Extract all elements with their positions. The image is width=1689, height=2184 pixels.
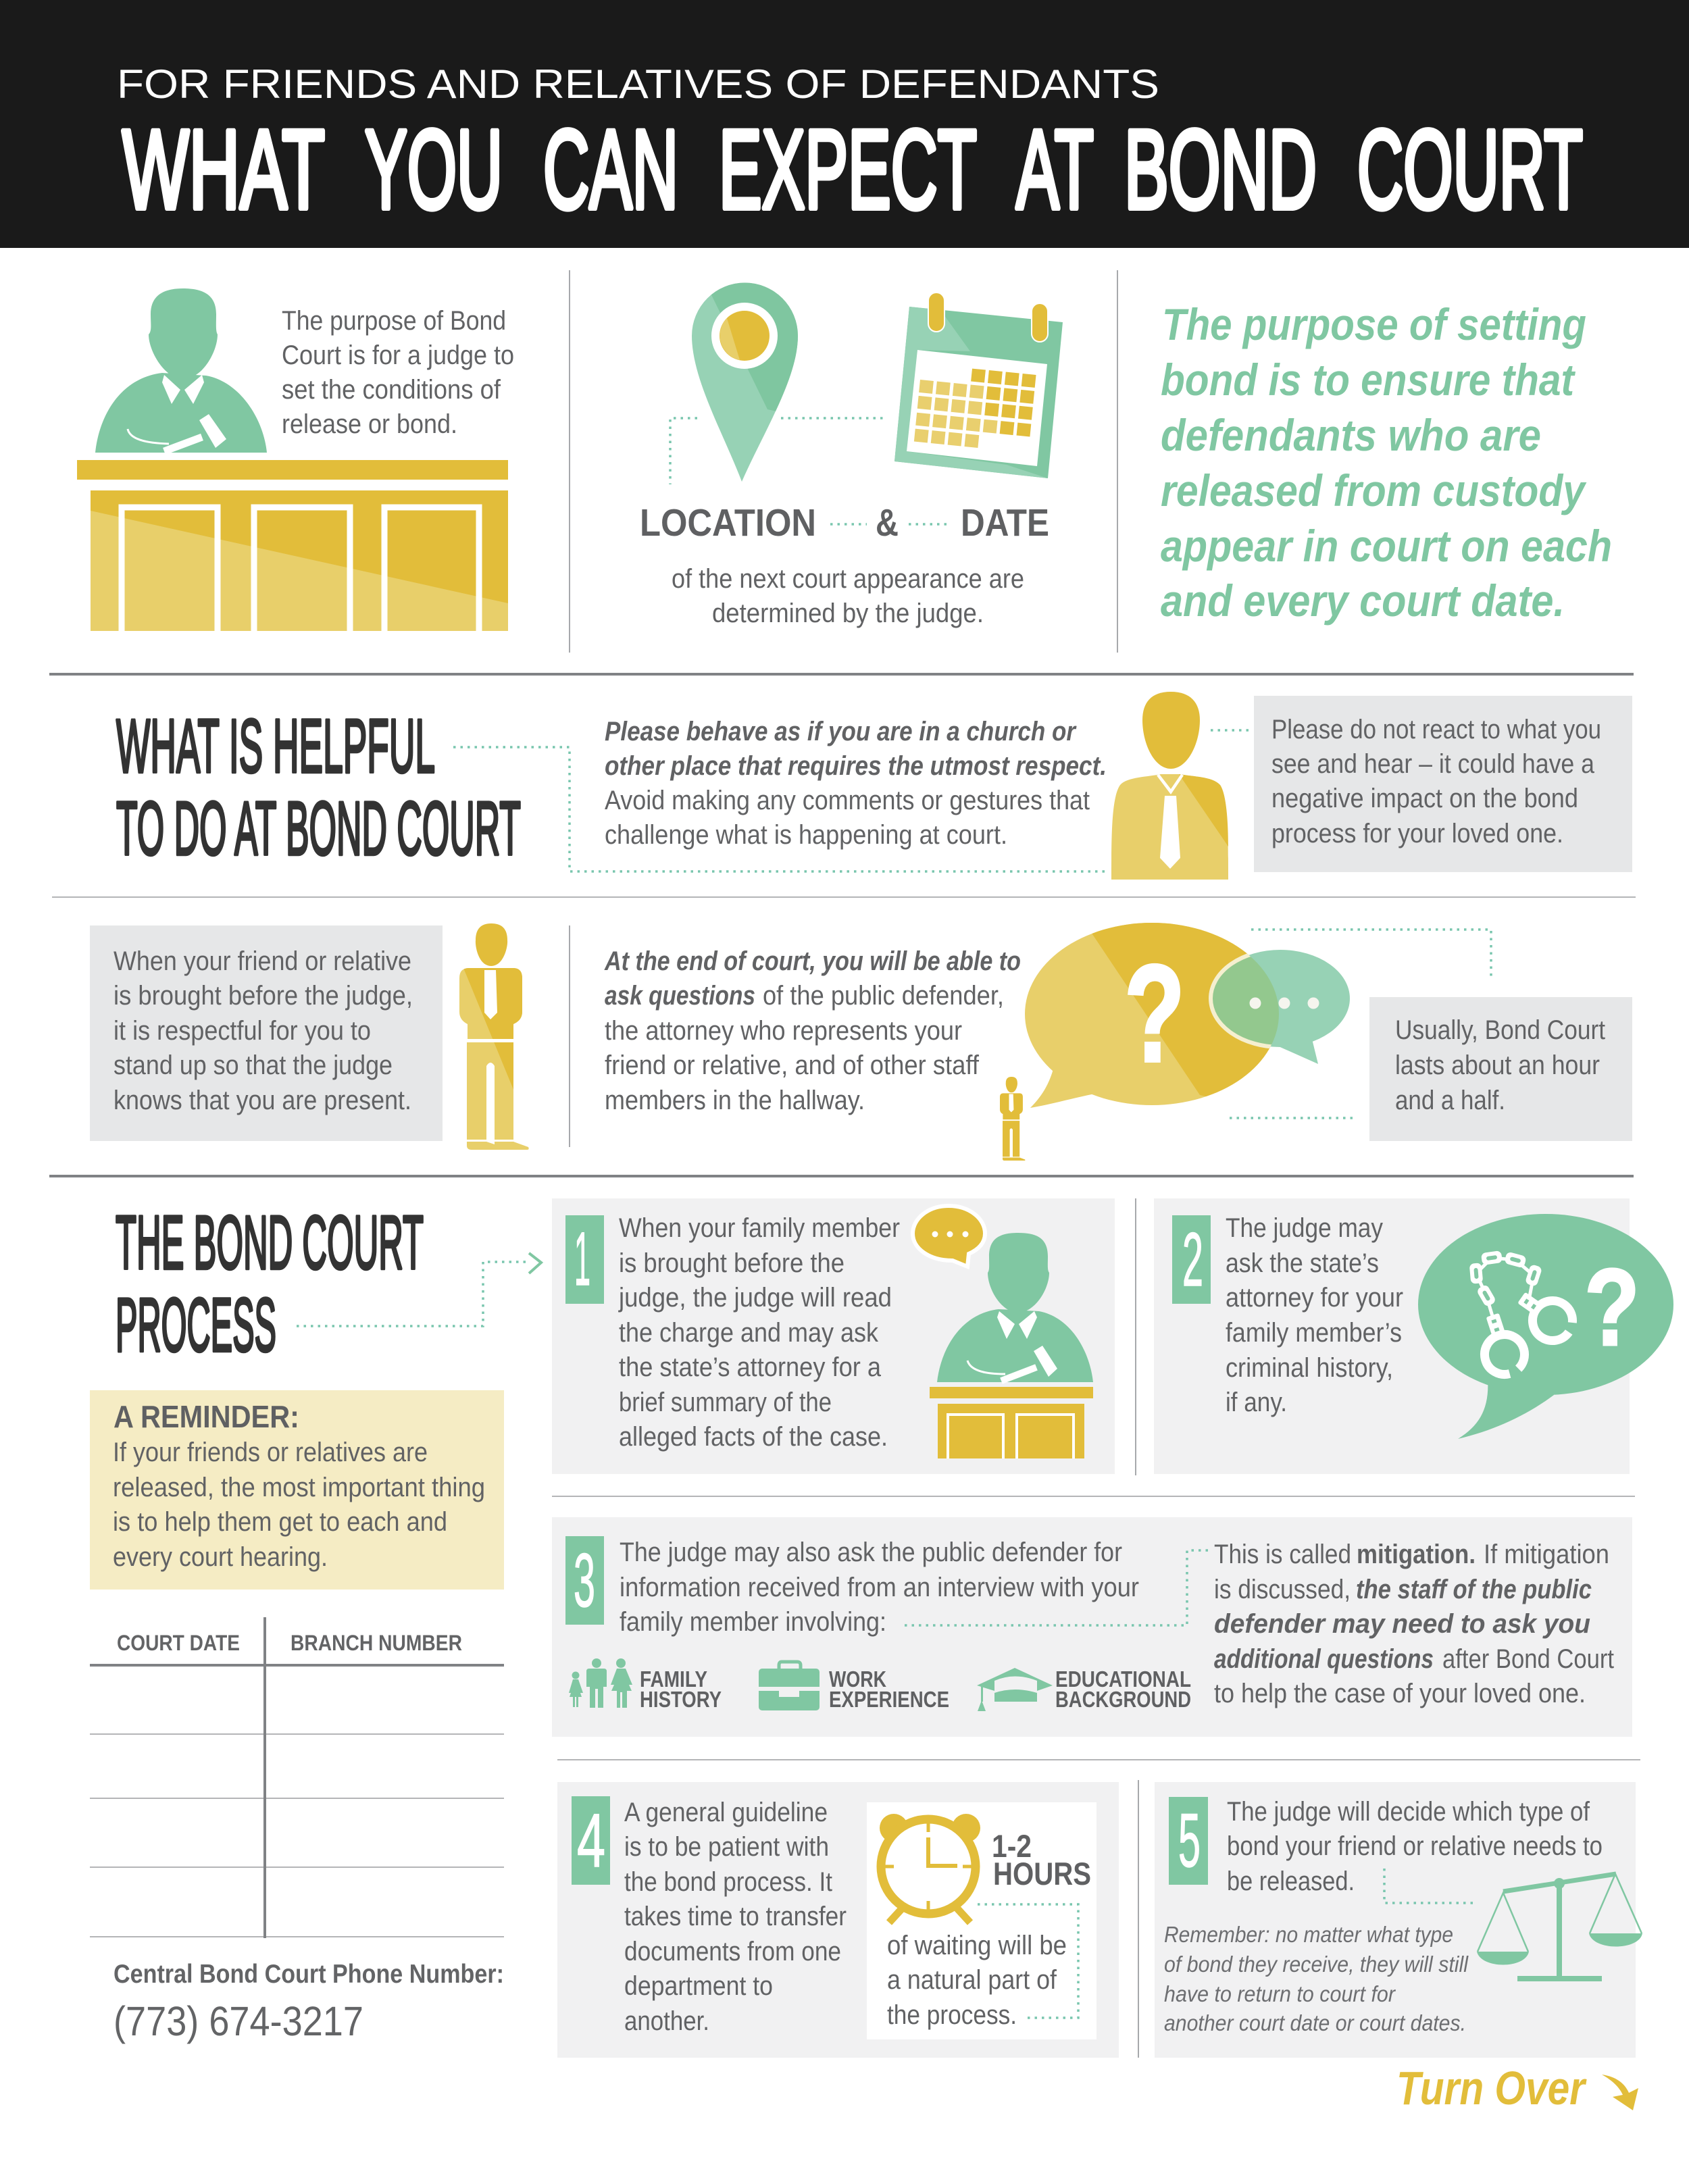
table: court dates: COURT DATE: [117, 1631, 240, 1655]
main title: WHAT: [122, 107, 325, 232]
text: step 3: family member involving:: [620, 1607, 886, 1637]
text: remember note: [1164, 1922, 1469, 2035]
icon: handcuffs speech bubble: [1418, 1214, 1673, 1439]
text: mitigation: If mitigation: [1484, 1540, 1609, 1569]
text: THE BOND COURT: [116, 1200, 424, 1285]
callout: purpose of setting bond: defendants who are: [1161, 410, 1541, 460]
icon: graduation cap: [977, 1668, 1053, 1711]
arrow: to step one: [297, 1253, 541, 1326]
text: waiting: a natural part of: [887, 1965, 1057, 1995]
text: behave with respect: [605, 717, 1107, 850]
main title: EXPECT: [719, 107, 977, 232]
panel: a reminder: released, the most important thing: [113, 1473, 485, 1502]
step number 1: 1: [574, 1217, 590, 1301]
text: step 3: The judge may also ask the public defender for: [620, 1538, 1122, 1567]
icon: judge: [95, 288, 267, 453]
text: ask questions: friend or relative, and of other staff: [605, 1050, 980, 1080]
text: ask questions: of the public defender,: [763, 981, 1004, 1011]
text: step 1: the charge and may ask: [619, 1318, 879, 1348]
text: purpose of bond court: Court is for a judge to: [282, 340, 514, 370]
panel: do not react: [1254, 696, 1632, 872]
text: step 5: The judge will decide which type of: [1227, 1797, 1590, 1827]
label: work experience: WORK: [829, 1667, 886, 1692]
text: purpose of bond court: [282, 306, 514, 439]
panel: a reminder: is to help them get to each and: [113, 1507, 447, 1537]
callout: purpose of setting bond: bond is to ensure that: [1161, 355, 1576, 405]
heading: location and date: [640, 501, 1049, 544]
callout: waiting time: [867, 1802, 1096, 2039]
text: step 2: criminal history,: [1226, 1353, 1393, 1383]
panel: step 4: [557, 1782, 1119, 2058]
header banner: [0, 0, 1689, 248]
icon: family: [569, 1658, 632, 1708]
label: educational background: [1055, 1667, 1191, 1712]
text: step 1: the state’s attorney for a: [619, 1352, 882, 1382]
label: family history: FAMILY: [640, 1667, 707, 1692]
text: ask questions: members in the hallway.: [605, 1086, 865, 1115]
panel: do not react: see and hear – it could have a: [1271, 749, 1595, 779]
step number 1: [565, 1215, 604, 1304]
panel: a reminder: [90, 1390, 504, 1590]
text: ask questions: the attorney who represents your: [605, 1016, 962, 1046]
main title: [122, 107, 1583, 232]
icon: handcuffs speech bubble: ?: [1584, 1246, 1640, 1369]
panel: step 1: [552, 1198, 1115, 1474]
icon: small speech bubble: [913, 1206, 985, 1267]
step number 3: [565, 1536, 604, 1625]
text: ask questions: [604, 946, 1021, 1115]
panel: a reminder: every court hearing.: [113, 1542, 328, 1572]
text: step 2: family member’s: [1226, 1318, 1402, 1348]
icon: location pin: [692, 282, 798, 482]
text: ask questions: ask questions: [605, 981, 755, 1011]
main title: AT: [1016, 107, 1094, 232]
text: mitigation: mitigation.: [1357, 1540, 1476, 1569]
text: step 1: judge, the judge will read: [618, 1283, 892, 1313]
heading: what is helpful: WHAT IS HELPFUL: [116, 704, 435, 788]
icon: speech bubbles with question: ?: [1124, 936, 1185, 1091]
step number 2: [1172, 1215, 1211, 1304]
text: step 5: [1227, 1797, 1603, 1896]
text: waiting: [887, 1931, 1067, 2030]
text: phone number: [114, 1960, 504, 2044]
step number 4: [572, 1796, 610, 1885]
text: waiting: of waiting will be: [887, 1931, 1067, 1960]
panel: do not react: negative impact on the bond: [1271, 784, 1578, 813]
label: 1-2 hours: 1-2: [992, 1828, 1032, 1864]
text: mitigation: is discussed,: [1214, 1575, 1351, 1604]
panel: step 3: [552, 1517, 1632, 1737]
text: step 2: [1226, 1213, 1403, 1417]
panel: bond court duration: lasts about an hour: [1395, 1050, 1600, 1080]
panel: step 5: [1155, 1782, 1642, 2058]
text: purpose of bond court: release or bond.: [282, 409, 457, 439]
label: family history: HISTORY: [640, 1687, 722, 1712]
panel: do not react: Please do not react to what you: [1271, 715, 1601, 744]
label: work experience: EXPERIENCE: [829, 1687, 949, 1712]
heading: what is helpful: [116, 704, 521, 871]
text: step 4: department to: [624, 1971, 773, 2001]
text: waiting: the process.: [887, 2000, 1017, 2030]
main title: YOU: [365, 107, 503, 232]
text: step 2: ask the state’s: [1226, 1248, 1379, 1278]
heading: the bond court process: [116, 1200, 424, 1367]
step number 2: 2: [1182, 1217, 1203, 1302]
text: step 4: A general guideline: [624, 1798, 828, 1827]
subtitle: FOR FRIENDS AND RELATIVES OF DEFENDANTS: [117, 61, 1159, 107]
text: next appearance: [672, 564, 1024, 628]
text: step 4: documents from one: [624, 1937, 841, 1966]
text: remember note: of bond they receive, they will still: [1164, 1952, 1469, 1977]
panel: bond court duration: and a half.: [1395, 1086, 1505, 1115]
text: step 3: information received from an interview with your: [620, 1573, 1139, 1602]
icon: briefcase: [759, 1662, 820, 1710]
icon: scales: [1477, 1874, 1642, 1981]
text: remember note: another court date or court dates.: [1164, 2010, 1466, 2035]
text: step 1: is brought before the: [619, 1248, 844, 1278]
text: turn over: Turn Over: [1396, 2062, 1587, 2114]
callout: purpose of setting bond: and every court date.: [1161, 576, 1565, 626]
heading: location and date: LOCATION: [640, 501, 816, 544]
text: mitigation: [1214, 1540, 1614, 1708]
callout: purpose of setting bond: The purpose of setting: [1162, 299, 1586, 349]
text: mitigation: after Bond Court: [1442, 1644, 1614, 1674]
label: 1-2 hours: HOURS: [993, 1856, 1091, 1891]
heading: the bond court process: PROCESS: [116, 1283, 276, 1367]
panel: a reminder: If your friends or relatives are: [113, 1438, 428, 1467]
icon: speech bubbles with question: [1025, 912, 1350, 1115]
heading: location and date: &: [876, 501, 899, 544]
panel: bond court duration: [1369, 997, 1632, 1141]
text: next appearance: determined by the judge.: [712, 599, 984, 628]
text: behave with respect: other place that requires the utmost respect.: [605, 751, 1107, 781]
icon: standing man: [459, 923, 529, 1150]
label: educational background: EDUCATIONAL: [1055, 1667, 1191, 1692]
icon: calendar: [894, 293, 1063, 478]
panel: location and date: [640, 270, 1063, 628]
label: work experience: [829, 1667, 949, 1712]
text: step 1: alleged facts of the case.: [619, 1422, 888, 1452]
icon: alarm clock: [880, 1814, 980, 1923]
text: step 4: takes time to transfer: [624, 1902, 847, 1931]
text: step 4: another.: [624, 2006, 709, 2036]
icon: bench: [77, 460, 508, 631]
panel: stand up for the judge: [90, 925, 443, 1141]
text: step 5: be released.: [1227, 1866, 1355, 1896]
main title: CAN: [543, 107, 678, 232]
step number 5: 5: [1178, 1798, 1201, 1883]
text: remember note: have to return to court for: [1164, 1981, 1396, 2006]
text: step 2: if any.: [1226, 1388, 1287, 1417]
text: TO DO AT BOND COURT: [116, 786, 521, 871]
text: mitigation: defender may need to ask you: [1214, 1609, 1590, 1639]
panel: bond court duration: Usually, Bond Court: [1395, 1015, 1605, 1045]
text: step 4: the bond process. It: [624, 1867, 832, 1897]
arrow: turn over: [1602, 2075, 1638, 2110]
text: step 5: bond your friend or relative needs to: [1227, 1831, 1603, 1861]
table: court dates: BRANCH NUMBER: [291, 1631, 462, 1655]
text: phone number: Central Bond Court Phone Number:: [114, 1960, 504, 1989]
panel: stand up for the judge: stand up so that the judge: [114, 1050, 393, 1080]
panel: stand up for the judge: When your friend or relative: [114, 946, 411, 976]
panel: stand up for the judge: is brought before the judge,: [114, 981, 413, 1011]
text: behave with respect: Please behave as if you are in a church or: [605, 717, 1077, 746]
text: mitigation: to help the case of your loved one.: [1214, 1679, 1586, 1708]
text: next appearance: of the next court appearance are: [672, 564, 1024, 594]
panel: stand up for the judge: it is respectful for you to: [114, 1016, 371, 1046]
icon: small standing man: [1000, 1077, 1025, 1161]
label: family history: [640, 1667, 722, 1712]
text: step 2: The judge may: [1226, 1213, 1383, 1243]
callout: purpose of setting bond: appear in court on each: [1161, 521, 1612, 571]
text: mitigation: the staff of the public: [1356, 1575, 1592, 1604]
text: step 4: [624, 1798, 847, 2036]
step number 5: [1169, 1797, 1208, 1885]
text: remember note: Remember: no matter what type: [1164, 1922, 1453, 1947]
text: step 1: When your family member: [619, 1213, 900, 1243]
panel: a reminder: A REMINDER:: [114, 1399, 299, 1434]
icon: man with tie: [1111, 692, 1228, 880]
text: behave with respect: Avoid making any comments or gestures that: [605, 786, 1090, 815]
text: ask questions: At the end of court, you will be able to: [604, 946, 1021, 976]
main title: BOND: [1124, 107, 1317, 232]
label: educational background: BACKGROUND: [1055, 1687, 1191, 1712]
text: mitigation: This is called: [1214, 1540, 1351, 1569]
text: step 4: is to be patient with: [624, 1832, 829, 1862]
text: mitigation: additional questions: [1214, 1644, 1434, 1674]
text: step 1: brief summary of the: [619, 1388, 832, 1417]
text: step 2: attorney for your: [1226, 1283, 1403, 1313]
step number 3: 3: [574, 1538, 595, 1623]
text: purpose of bond court: set the conditions of: [282, 375, 501, 405]
text: behave with respect: challenge what is happening at court.: [605, 820, 1007, 850]
panel: step 2: [1154, 1198, 1673, 1474]
callout: purpose of setting bond: [1161, 299, 1612, 626]
table: court dates: [90, 1617, 504, 1938]
text: phone number: (773) 674-3217: [114, 1998, 363, 2044]
callout: purpose of setting bond: released from custody: [1161, 465, 1587, 515]
label: 1-2 hours: [992, 1828, 1091, 1891]
panel: judge at the bench: [77, 288, 514, 631]
step number 4: 4: [577, 1798, 605, 1883]
text: step 1: [618, 1213, 900, 1452]
text: purpose of bond court: The purpose of Bond: [282, 306, 506, 336]
panel: do not react: process for your loved one.: [1271, 819, 1563, 848]
panel: stand up for the judge: knows that you are present.: [114, 1086, 411, 1115]
text: step 3: [620, 1538, 1139, 1637]
heading: location and date: DATE: [961, 501, 1049, 544]
icon: judge at bench: [930, 1233, 1093, 1458]
